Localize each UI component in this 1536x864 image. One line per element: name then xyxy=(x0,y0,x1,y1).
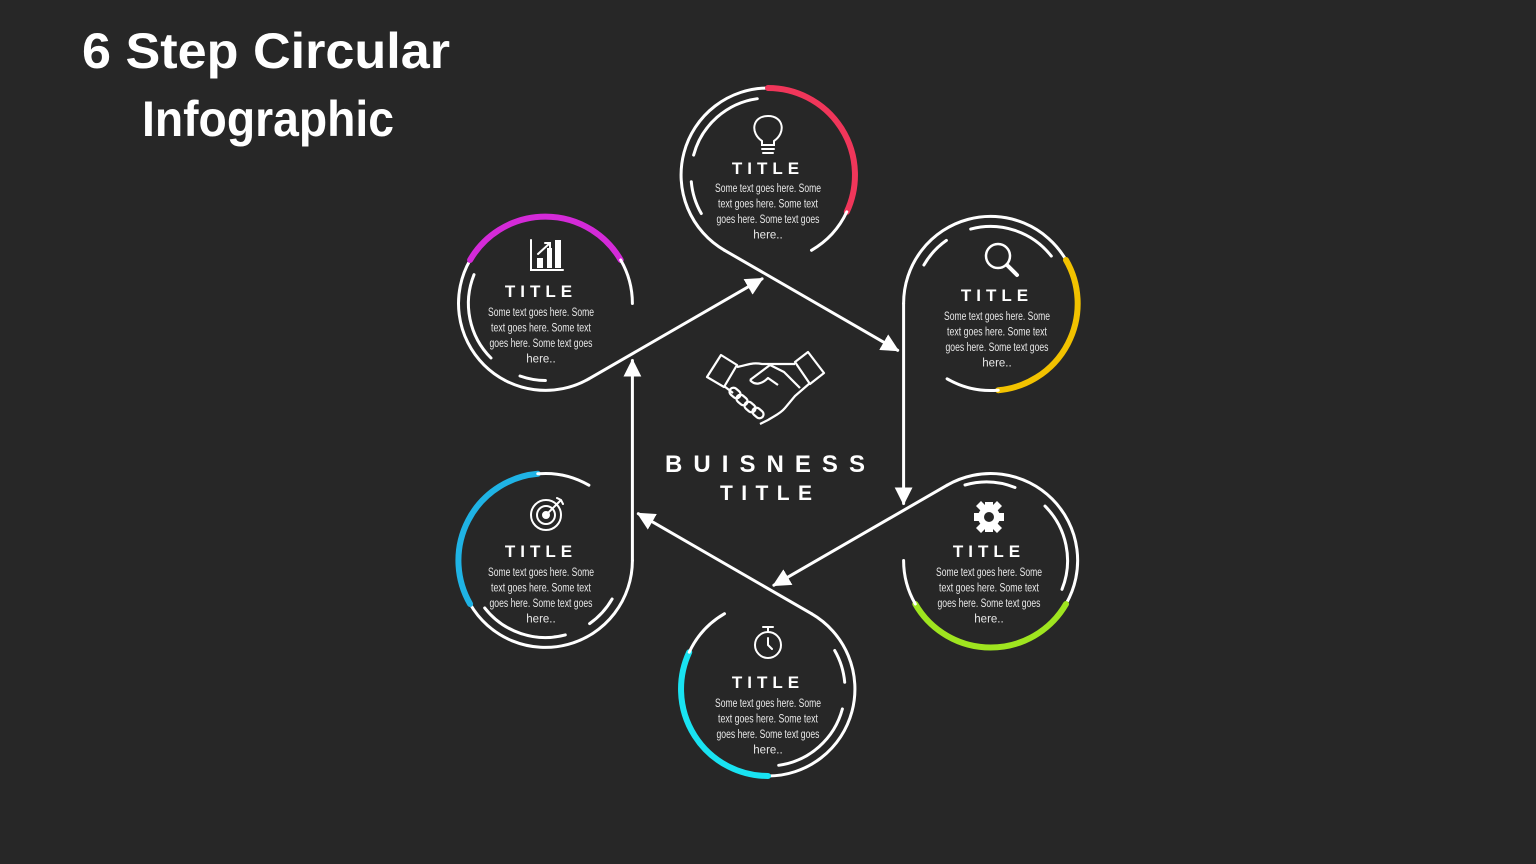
icon: stopwatch xyxy=(755,627,781,658)
text: step4 xyxy=(715,698,821,756)
text: step1: goes here. Some text goes xyxy=(716,214,820,226)
heading: step2: TITLE xyxy=(961,286,1033,305)
text: step1: here.. xyxy=(753,230,783,242)
text: step5: goes here. Some text goes xyxy=(490,598,593,610)
text: step4: goes here. Some text goes xyxy=(716,729,820,741)
center title: TITLE xyxy=(720,482,812,505)
text: step1 xyxy=(715,183,821,242)
text: step3 xyxy=(936,567,1042,626)
icon: bulb xyxy=(754,116,782,153)
text: step6: goes here. Some text goes xyxy=(490,338,593,350)
arrow: step3 to step4 xyxy=(774,485,947,585)
heading: step1: TITLE xyxy=(732,159,804,178)
center title xyxy=(665,451,865,505)
heading: step3: TITLE xyxy=(953,542,1025,561)
icon: magnifier xyxy=(986,244,1017,275)
text: step2: goes here. Some text goes xyxy=(946,342,1049,354)
text: step5: Some text goes here. Some xyxy=(488,567,594,579)
text: step5: here.. xyxy=(526,614,556,626)
step 4: bottom (cyan) xyxy=(638,514,855,776)
icon: chart xyxy=(531,240,563,270)
heading: step5: TITLE xyxy=(505,542,577,561)
title: 6 Step Circular xyxy=(82,23,450,79)
step 1: top (red) xyxy=(681,88,898,350)
title: Infographic xyxy=(142,91,394,147)
text: step3: goes here. Some text goes xyxy=(938,598,1041,610)
text: step2: text goes here. Some text xyxy=(947,326,1048,338)
icon: target xyxy=(531,498,563,530)
text: step6: here.. xyxy=(526,354,556,366)
text: step4: Some text goes here. Some xyxy=(715,698,821,710)
icon: gear xyxy=(974,501,1004,533)
text: step3: Some text goes here. Some xyxy=(936,567,1042,579)
heading: step4: TITLE xyxy=(732,673,804,692)
step 6: left top (magenta) xyxy=(459,217,762,390)
heading: step6: TITLE xyxy=(505,282,577,301)
text: step2: Some text goes here. Some xyxy=(944,311,1050,323)
step 5: left bottom (blue) xyxy=(458,360,632,647)
title xyxy=(82,23,450,147)
center title: BUISNESS xyxy=(665,451,865,478)
text: step5: text goes here. Some text xyxy=(491,582,592,594)
text: step3: here.. xyxy=(974,614,1004,626)
text: step5 xyxy=(488,567,594,626)
arrow: step1 to step2 xyxy=(724,250,898,350)
text: step4: here.. xyxy=(753,744,783,756)
arrow: step5 to step6 xyxy=(631,360,634,560)
text: step6: Some text goes here. Some xyxy=(488,307,594,319)
step 2: right top (yellow) xyxy=(904,216,1078,503)
text: step4: text goes here. Some text xyxy=(718,714,819,726)
arrow: step6 to step1 xyxy=(589,279,762,379)
text: step6 xyxy=(488,307,594,366)
arrow: step4 to step5 xyxy=(638,514,812,614)
text: step6: text goes here. Some text xyxy=(491,322,592,334)
text: step1: Some text goes here. Some xyxy=(715,183,821,195)
text: step2: here.. xyxy=(982,358,1012,370)
text: step3: text goes here. Some text xyxy=(939,582,1040,594)
step 3: right bottom (green) xyxy=(774,474,1078,648)
text: step2 xyxy=(944,311,1050,370)
icon: handshake xyxy=(707,352,824,424)
text: step1: text goes here. Some text xyxy=(718,198,819,210)
arrow: step2 to step3 xyxy=(902,304,905,504)
